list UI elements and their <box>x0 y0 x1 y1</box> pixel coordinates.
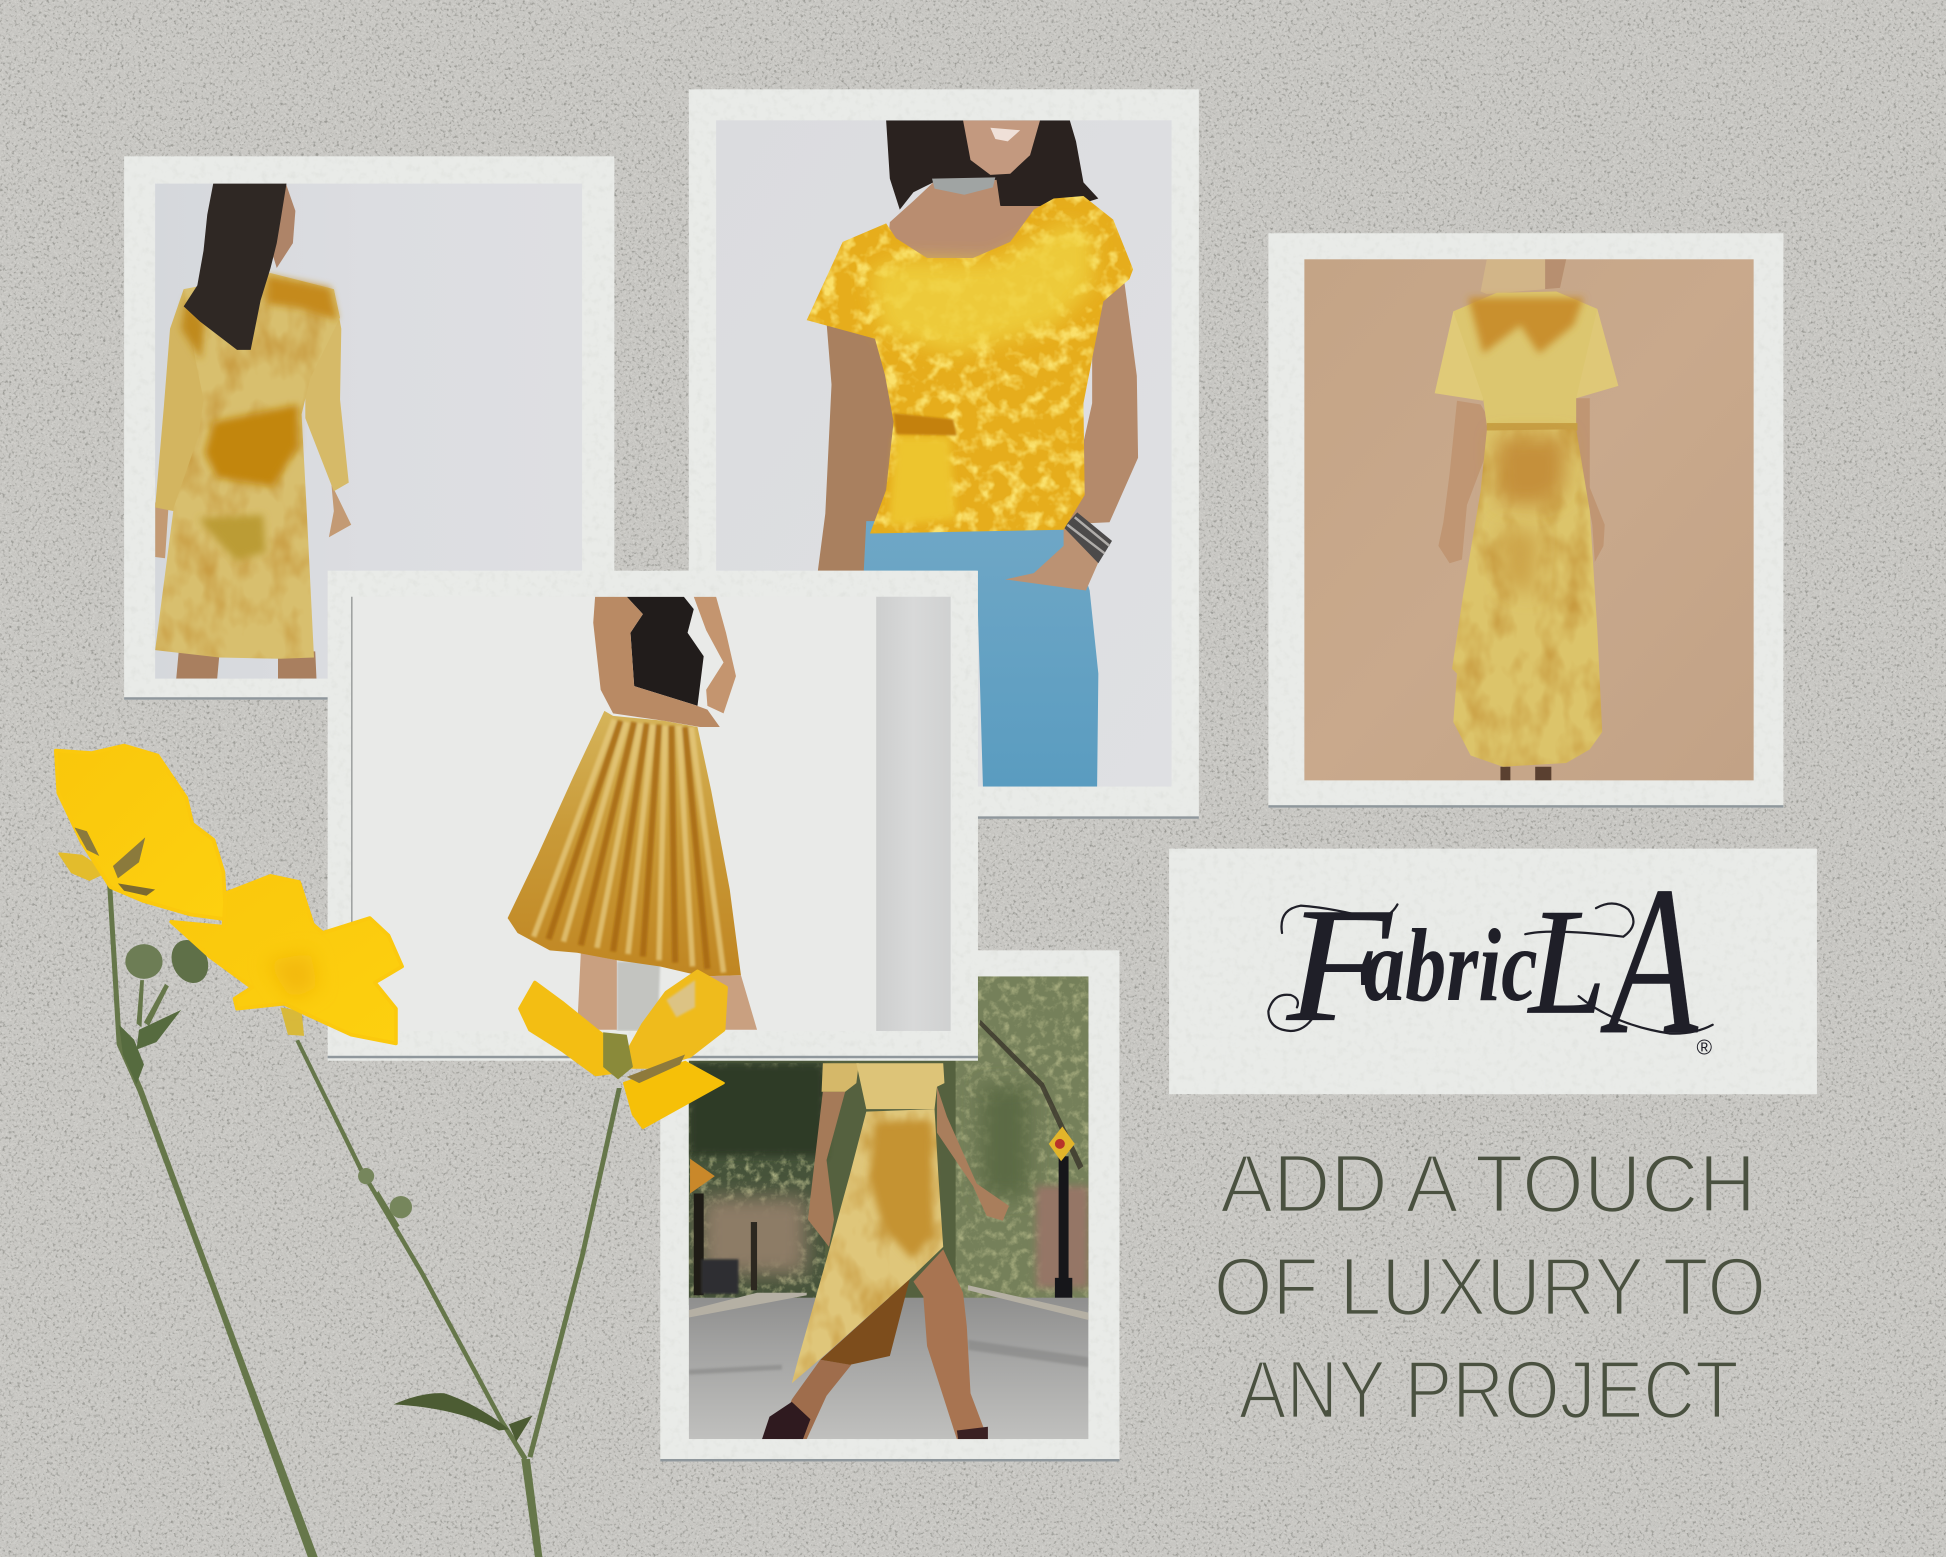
logo: FabricLA script wordmark: F <box>1286 875 1393 1056</box>
panel: photo card, back of long-sleeve velvet dress <box>124 156 614 700</box>
logo: FabricLA script wordmark: ® <box>1697 1037 1713 1060</box>
panel: photo card, crushed velvet yellow t-shirt <box>689 89 1199 819</box>
panel: photo card, street shot of asymmetric velvet dress <box>660 950 1119 1461</box>
photo: tree-lined street <box>689 976 1088 1439</box>
figure: model in black top and pleated skirt <box>508 597 757 1031</box>
logo: FabricLA script wordmark: L <box>1527 877 1606 1045</box>
stems <box>107 877 622 1557</box>
heading: tagline: OF LUXURY TO <box>1214 1241 1766 1333</box>
figure: model in yellow t-shirt and jeans <box>807 120 1138 787</box>
panel: photo card, pleated gold velvet skirt <box>328 571 978 1061</box>
flower: middle <box>171 876 402 1043</box>
t-shirt <box>807 196 1133 533</box>
heading: tagline: ANY PROJECT <box>1239 1344 1739 1436</box>
figure: walking model in gold dress <box>762 1063 1009 1439</box>
figure: model in gold wrap dress, back view <box>1435 259 1618 780</box>
illustration: pressed yellow flowers <box>56 746 726 1557</box>
logo: FabricLA script wordmark: abric <box>1364 907 1538 1023</box>
figure: model in gold dress, back view <box>155 182 351 679</box>
panel: photo card, back of velvet wrap dress on tan <box>1268 233 1783 808</box>
logo: FabricLA script wordmark: A <box>1600 843 1699 1079</box>
buds <box>125 944 163 979</box>
logo flourishes <box>1268 903 1713 1034</box>
flower: top left <box>56 746 226 919</box>
flower: right <box>520 971 726 1128</box>
heading: tagline: ADD A TOUCH <box>1220 1138 1756 1230</box>
leaf <box>393 1393 532 1442</box>
heading: tagline <box>1214 1138 1766 1436</box>
logo: FabricLA script wordmark <box>1268 843 1713 1079</box>
panel: logo card <box>1169 843 1817 1094</box>
